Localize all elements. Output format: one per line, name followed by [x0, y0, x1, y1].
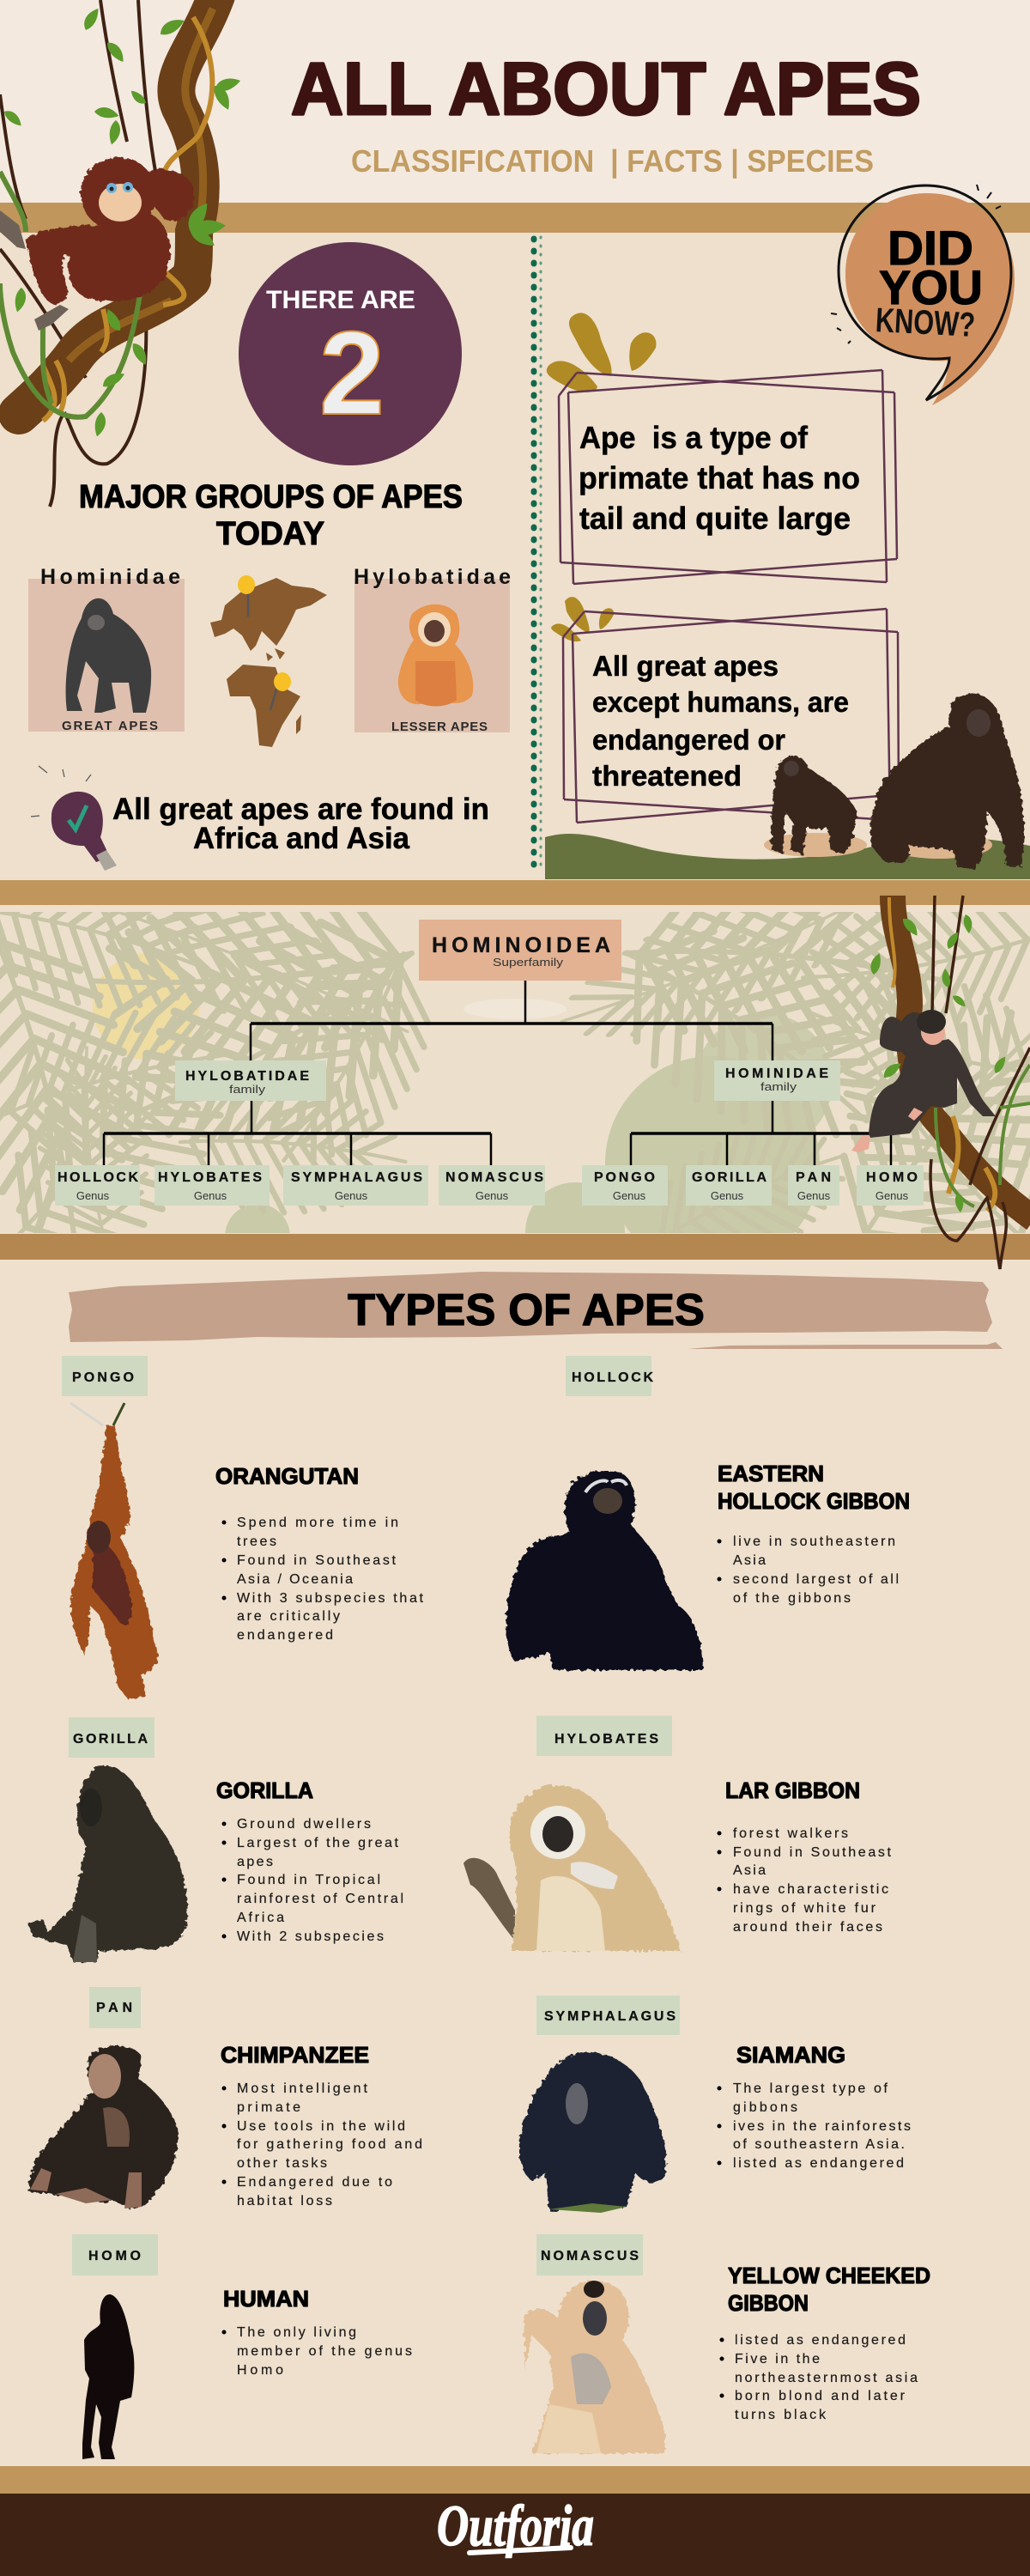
heading: eastern hollock gibbon: EASTERN [718, 1461, 824, 1486]
facts: gorilla: Africa [237, 1911, 284, 1925]
facts: yellow cheeked gibbon: northeasternmost asia [735, 2371, 918, 2385]
heading: major groups: MAJOR GROUPS OF APES [79, 479, 463, 515]
tag: pan [89, 1987, 141, 2028]
tag: pongo: PONGO [72, 1370, 134, 1385]
card: yellow cheeked gibbon [524, 2234, 930, 2453]
footer [0, 2494, 1030, 2576]
facts: chimpanzee: habitat loss [237, 2194, 332, 2208]
illustration: cartoon orangutan on vine [0, 0, 242, 507]
node: Homo genus: Genus [876, 1189, 909, 1202]
tag: gorilla [69, 1717, 154, 1758]
facts: siamang: listed as endangered [733, 2156, 904, 2171]
card: orangutan [62, 1356, 424, 1700]
tag: symphalagus [536, 1996, 680, 2035]
facts: siamang: The largest type of [733, 2081, 888, 2096]
image: chimpanzee [28, 2046, 179, 2208]
node: Homo genus: HOMO [866, 1170, 918, 1185]
callout: there are 2: THERE ARE [266, 286, 415, 314]
heading: lar gibbon: LAR GIBBON [725, 1777, 860, 1803]
image: human silhouette [82, 2294, 134, 2459]
node: Hominidae family: family [760, 1080, 797, 1093]
facts: orangutan: are critically [237, 1609, 340, 1624]
facts: chimpanzee [221, 2081, 422, 2208]
facts: siamang: gibbons [733, 2100, 797, 2115]
heading: siamang: SIAMANG [736, 2042, 845, 2068]
image: gorilla sitting [28, 1765, 187, 1962]
facts: hollock gibbon [718, 1534, 899, 1606]
facts: gorilla: Largest of the great [237, 1836, 399, 1850]
card: lar gibbon [464, 1716, 892, 1951]
heading band: types of apes [69, 1272, 1003, 1349]
facts: gorilla: rainforest of Central [237, 1892, 403, 1906]
logo: Outforia: Outforia [437, 2493, 594, 2558]
heading: major groups [79, 479, 463, 552]
text box: endangered fact [563, 609, 899, 823]
image: lar gibbon [464, 1785, 681, 1951]
node: Hominidae family: HOMINIDAE [725, 1066, 828, 1081]
node: Gorilla genus: GORILLA [692, 1170, 766, 1185]
facts: yellow cheeked gibbon: born blond and later [735, 2389, 906, 2403]
facts: yellow cheeked gibbon: listed as endangered [735, 2333, 906, 2348]
node: Pongo genus: PONGO [594, 1170, 655, 1185]
text box: ape definition: Ape is a type of [579, 420, 809, 455]
panel: Hominidae great apes: Hominidae [40, 565, 180, 589]
facts: hollock gibbon: second largest of all [733, 1572, 899, 1587]
panel: Hominidae great apes [28, 565, 185, 733]
card: human [72, 2234, 412, 2459]
facts: orangutan: endangered [237, 1628, 333, 1643]
speech bubble: did you know: KNOW? [875, 301, 976, 344]
facts: lar gibbon: rings of white fur [733, 1901, 876, 1916]
panel: Hylobatidae lesser apes: LESSER APES [391, 720, 488, 734]
card: chimpanzee [28, 1987, 422, 2208]
node: Hominoidea superfamily: HOMINOIDEA [432, 933, 610, 957]
heading: gorilla: GORILLA [216, 1777, 313, 1803]
tag: pan: PAN [96, 2001, 132, 2015]
node: Hylobatidae family: family [229, 1083, 266, 1096]
node: Nomascus genus: Genus [476, 1189, 509, 1202]
facts: orangutan: Spend more time in [237, 1516, 398, 1530]
icon: world map with pins [210, 575, 327, 747]
speech bubble: did you know: YOU [879, 260, 983, 314]
illustration: two gorillas [764, 694, 1024, 869]
facts: orangutan: Found in Southeast [237, 1553, 397, 1568]
text box: endangered fact: endangered or [592, 724, 785, 756]
facts: gorilla: Ground dwellers [237, 1817, 371, 1832]
image: orangutan hanging [70, 1403, 158, 1700]
text box: ape definition [559, 370, 897, 584]
node: Hylobates genus [154, 1165, 270, 1206]
heading: human: HUMAN [223, 2286, 309, 2312]
node: Hollock genus: HOLLOCK [58, 1170, 138, 1185]
panel: Hominidae great apes: GREAT APES [62, 719, 158, 733]
image: siamang [519, 2052, 666, 2213]
tag: hylobates: HYLOBATES [554, 1732, 658, 1747]
node: Hollock genus: Genus [76, 1189, 110, 1202]
subtitle: CLASSIFICATION | FACTS | SPECIES [351, 143, 874, 179]
tag: nomascus: NOMASCUS [541, 2249, 639, 2263]
callout: there are 2: 2 [319, 307, 385, 440]
dotted vertical divider [534, 237, 541, 868]
text box: ape definition: primate that has no [579, 460, 860, 495]
facts: chimpanzee: Use tools in the wild [237, 2119, 405, 2134]
facts: chimpanzee: primate [237, 2100, 300, 2115]
facts: yellow cheeked gibbon [719, 2333, 918, 2422]
text box: endangered fact: threatened [592, 760, 742, 792]
facts: lar gibbon: forest walkers [733, 1826, 848, 1841]
illustration: chimp on vine [851, 896, 1030, 1269]
node: Hominoidea superfamily: Superfamily [493, 956, 564, 969]
divider band bottom [0, 2466, 1030, 2494]
heading: chimpanzee: CHIMPANZEE [221, 2042, 369, 2068]
node: Hylobatidae family: HYLOBATIDAE [185, 1069, 309, 1084]
facts: lar gibbon: Asia [733, 1863, 766, 1878]
icon: small splash accents [551, 597, 614, 641]
facts: orangutan: With 3 subspecies that [237, 1591, 424, 1606]
text box: endangered fact: except humans, are [592, 686, 849, 718]
node: Hylobatidae family [175, 1060, 326, 1101]
facts: lar gibbon [718, 1826, 892, 1935]
text box: endangered fact: All great apes [592, 650, 779, 682]
card: siamang [519, 1996, 911, 2213]
tag: hollock [566, 1356, 653, 1396]
facts: chimpanzee: Most intelligent [237, 2081, 368, 2096]
node: Hylobates genus: HYLOBATES [158, 1170, 262, 1185]
facts: lar gibbon: have characteristic [733, 1882, 888, 1897]
heading: major groups: TODAY [216, 516, 324, 552]
heading: yellow cheeked gibbon: GIBBON [728, 2290, 809, 2316]
node: Symphalagus genus [283, 1165, 428, 1206]
callout: there are 2 [239, 242, 462, 465]
facts: lar gibbon: Found in Southeast [733, 1845, 892, 1860]
card: eastern hollock gibbon [506, 1356, 910, 1670]
tag: symphalagus: SYMPHALAGUS [544, 2009, 676, 2024]
facts: gorilla [221, 1817, 403, 1944]
panel: Hylobatidae lesser apes: Hylobatidae [354, 565, 511, 589]
tag: nomascus [536, 2234, 643, 2275]
speech bubble: did you know: DID [888, 221, 973, 275]
icon: light bulb [31, 766, 117, 871]
node: Pan genus [788, 1165, 839, 1206]
facts: hollock gibbon: of the gibbons [733, 1591, 851, 1606]
facts: orangutan [221, 1516, 424, 1643]
node: Hollock genus [55, 1165, 140, 1206]
facts: chimpanzee: for gathering food and [237, 2137, 422, 2152]
tag: hollock: HOLLOCK [572, 1370, 653, 1385]
facts: human: Homo [237, 2363, 283, 2378]
heading: orangutan: ORANGUTAN [215, 1463, 359, 1489]
heading band: types of apes: TYPES OF APES [348, 1285, 705, 1335]
node: Pongo genus [582, 1165, 668, 1206]
facts: yellow cheeked gibbon: turns black [735, 2408, 827, 2422]
facts: gorilla: With 2 subspecies [237, 1929, 384, 1944]
heading: eastern hollock gibbon: HOLLOCK GIBBON [718, 1488, 910, 1514]
text box: ape definition: tail and quite large [579, 501, 851, 536]
facts: siamang: of southeastern Asia. [733, 2137, 905, 2152]
tag: gorilla: GORILLA [73, 1732, 148, 1747]
speech bubble: did you know [831, 185, 1015, 405]
facts: orangutan: trees [237, 1534, 276, 1549]
facts: hollock gibbon: live in southeastern [733, 1534, 895, 1549]
node: Gorilla genus [686, 1165, 772, 1206]
icon: splash accents [547, 313, 656, 392]
divider band lower [0, 1234, 1030, 1260]
facts: yellow cheeked gibbon: Five in the [735, 2352, 820, 2366]
heading: yellow cheeked gibbon [728, 2263, 930, 2316]
tag: homo [72, 2234, 158, 2275]
org chart lines [104, 981, 891, 1165]
node: Nomascus genus: NOMASCUS [445, 1170, 543, 1185]
taxonomy section background [0, 912, 1030, 1233]
tag: hylobates [536, 1716, 672, 1756]
facts: lar gibbon: around their faces [733, 1920, 882, 1935]
tag: pongo [62, 1356, 148, 1396]
node: Symphalagus genus: Genus [335, 1189, 368, 1202]
facts: siamang [718, 2081, 911, 2171]
title: ALL ABOUT APES [291, 48, 921, 131]
panel: Hylobatidae lesser apes [354, 565, 511, 734]
node: Gorilla genus: Genus [711, 1189, 744, 1202]
facts: gorilla: apes [237, 1855, 273, 1869]
ground [545, 834, 1030, 879]
node: Symphalagus genus: SYMPHALAGUS [291, 1170, 422, 1185]
text: all great apes found: All great apes are found in [112, 793, 489, 826]
node: Hominoidea superfamily [419, 920, 621, 981]
text: all great apes found: Africa and Asia [193, 822, 410, 855]
facts: chimpanzee: Endangered due to [237, 2175, 392, 2190]
facts: chimpanzee: other tasks [237, 2156, 327, 2171]
facts: orangutan: Asia / Oceania [237, 1572, 353, 1587]
card: gorilla [28, 1717, 403, 1962]
divider band top [0, 203, 1030, 233]
node: Nomascus genus [439, 1165, 545, 1206]
heading: yellow cheeked gibbon: YELLOW CHEEKED [728, 2263, 930, 2288]
node: Pongo genus: Genus [613, 1189, 646, 1202]
node: Homo genus [857, 1165, 924, 1206]
text: all great apes found [112, 793, 489, 855]
header background [0, 0, 1030, 203]
node: Pan genus: Genus [797, 1189, 831, 1202]
node: Hylobates genus: Genus [194, 1189, 227, 1202]
node: Pan genus: PAN [796, 1170, 831, 1185]
divider band middle [0, 880, 1030, 905]
tag: homo: HOMO [88, 2249, 141, 2263]
heading: eastern hollock gibbon [718, 1461, 910, 1514]
facts: gorilla: Found in Tropical [237, 1873, 380, 1887]
facts: hollock gibbon: Asia [733, 1553, 766, 1568]
image: yellow cheeked gibbon [524, 2281, 665, 2453]
node: Hominidae family [714, 1060, 840, 1101]
facts: siamang: ives in the rainforests [733, 2119, 911, 2134]
facts: human: The only living [237, 2325, 356, 2340]
image: hollock gibbon [506, 1471, 703, 1670]
facts: human [221, 2325, 412, 2378]
facts: human: member of the genus [237, 2344, 412, 2359]
